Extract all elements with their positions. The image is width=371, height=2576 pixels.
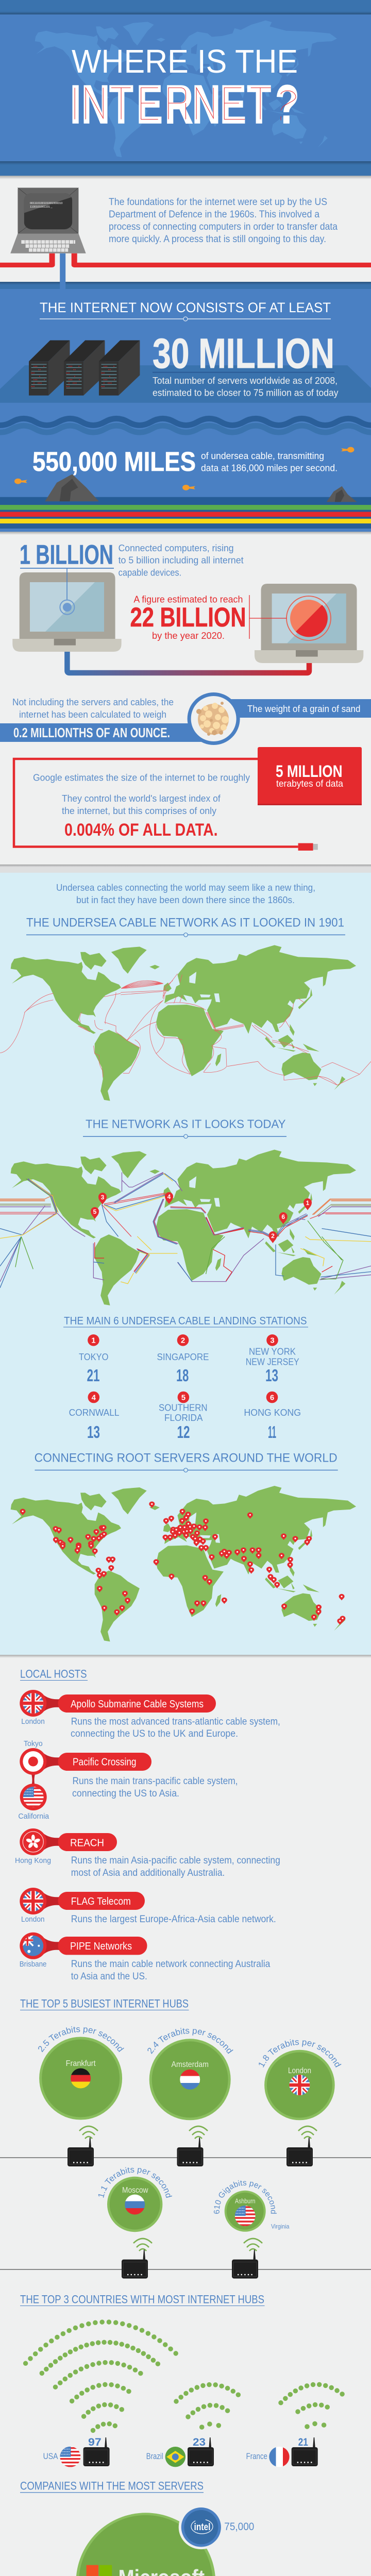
heading today: THE NETWORK AS IT LOOKS TODAY (86, 1117, 285, 1131)
logo: Microsoft (87, 2565, 205, 2576)
landing station list: 2 (181, 1336, 185, 1345)
country: Brazil: 23 (193, 2436, 206, 2448)
heading root servers: CONNECTING ROOT SERVERS AROUND THE WORLD (35, 1451, 338, 1465)
country: France (246, 2436, 318, 2468)
country: USA (43, 2436, 110, 2467)
weight text: Not including the servers and cables, the (12, 697, 174, 707)
signal arcs: Brazil (176, 2384, 240, 2417)
google data panel: terabytes of data (276, 778, 344, 789)
host: PIPE Networks: to Asia and the US. (71, 1971, 147, 1982)
host: FLAG Telecom: London (21, 1915, 44, 1924)
intro text: process of connecting computers in order to transfer data (109, 222, 338, 232)
google data panel: the internet, but this comprises of only (62, 805, 217, 816)
callout: 22 billion: 22 BILLION (130, 602, 246, 633)
intro text: more quickly. A process that is still ongoing to this day. (109, 234, 326, 245)
panel: connected computers: capable devices. (119, 567, 181, 578)
title inline strokes (75, 88, 296, 120)
hub: Amsterdam: 2.4 Terabits per second (147, 2028, 233, 2054)
bubbles (58, 2505, 311, 2576)
landing station list: HONG KONG (244, 1408, 301, 1418)
landing station list (69, 1334, 301, 1442)
connector between laptops (67, 652, 309, 673)
waves (0, 418, 371, 432)
host: FLAG Telecom: FLAG Telecom (71, 1896, 131, 1907)
host: Apollo: London (21, 1717, 45, 1726)
panel: local hosts (15, 1667, 280, 1982)
landing station list: 18 (176, 1366, 189, 1385)
hub: Ashburn: Virginia (271, 2223, 290, 2230)
host: REACH: most of Asia and additionally Australia. (71, 1868, 225, 1878)
intro text: Undersea cables connecting the world may seem like a new thing, (56, 882, 315, 893)
intro text: but in fact they have been down there since the 1860s. (76, 894, 295, 905)
hub: London (259, 2039, 341, 2166)
panel: internet consists of: estimated to be closer to 75 million as of today (153, 387, 339, 398)
host: Pacific Crossing: Pacific Crossing (73, 1757, 136, 1768)
landing station list: CORNWALL (69, 1408, 120, 1418)
icon: servers (0, 340, 371, 403)
host: REACH: Runs the main Asia-pacific cable system, connecting (71, 1855, 280, 1866)
landing station pins on map: 5 (93, 1208, 97, 1215)
hub: Amsterdam (147, 2028, 233, 2166)
panel: internet consists of: of undersea cable, transmitting (201, 450, 324, 461)
panel: connected computers (0, 540, 371, 851)
callout: 22 billion (130, 594, 286, 641)
landing station list: 1 (91, 1336, 96, 1345)
logo: Intel: intel (194, 2522, 210, 2533)
panel: top 3 countries (20, 2293, 345, 2468)
logo: Intel (191, 2519, 254, 2534)
title line two: INTERNET? (70, 74, 299, 135)
hub: London: London (288, 2066, 311, 2075)
country: France: 21 (298, 2436, 308, 2448)
host: Pacific Crossing: connecting the US to Asia. (72, 1788, 179, 1799)
callout: 22 billion: by the year 2020. (152, 630, 225, 641)
intro text (109, 197, 338, 245)
host: Apollo: connecting the US to the UK and Europe. (71, 1728, 238, 1739)
landing station list: 11 (268, 1422, 276, 1442)
heading 1901: THE UNDERSEA CABLE NETWORK AS IT LOOKED IN 1901 (26, 916, 344, 929)
weight stat: 0.2 MILLIONTHS OF AN OUNCE. (13, 725, 170, 740)
landing station list: TOKYO (79, 1352, 108, 1362)
hub: London: 1.8 Terabits per second (259, 2039, 341, 2067)
host: REACH: REACH (70, 1838, 104, 1849)
google data panel: 5 MILLION (276, 762, 342, 781)
host: Pacific Crossing: California (18, 1812, 49, 1821)
landing station list: 4 (92, 1393, 96, 1402)
host: Apollo: Runs the most advanced trans-atlantic cable system, (71, 1717, 280, 1727)
host: REACH (15, 1828, 280, 1878)
heading: COMPANIES WITH THE MOST SERVERS (20, 2479, 204, 2493)
hub: Amsterdam: Amsterdam (171, 2060, 209, 2069)
weight text: internet has been calculated to weigh (19, 709, 166, 720)
icon: vintage computer (0, 188, 371, 290)
map: today's cable network (0, 1149, 371, 1306)
hub: Frankfurt (38, 2026, 124, 2166)
heading landing stations: THE MAIN 6 UNDERSEA CABLE LANDING STATIONS (64, 1315, 307, 1327)
landing station pins on map: 4 (167, 1193, 171, 1200)
title line one: WHERE IS THE (72, 43, 298, 80)
landing station list: 21 (87, 1366, 100, 1385)
signal arcs: France (281, 2384, 345, 2412)
panel: intro: 1100101001101 _ (30, 206, 53, 209)
host: FLAG Telecom (20, 1888, 276, 1925)
host: PIPE Networks: Brisbane (20, 1960, 46, 1969)
icon: left laptop (12, 568, 122, 652)
panel: internet consists of: data at 186,000 miles per second. (201, 463, 338, 473)
host: Pacific Crossing (18, 1739, 238, 1821)
hub: Ashburn: 610 Gigabits per second (213, 2180, 277, 2214)
country: USA: USA (43, 2451, 58, 2461)
hub: Frankfurt: Frankfurt (66, 2059, 96, 2068)
country: USA: 97 (88, 2436, 102, 2448)
intro text (56, 882, 315, 905)
landing station list: SINGAPORE (157, 1352, 209, 1362)
landing station pins on map: 6 (281, 1213, 285, 1221)
map: 1901 cable network (0, 945, 371, 1101)
panel: companies with most servers (20, 2479, 345, 2576)
landing station list: 13 (87, 1422, 100, 1442)
google data panel: 0.004% OF ALL DATA. (64, 820, 218, 840)
panel: top 5 hubs (0, 1997, 371, 2279)
panel: internet consists of: Total number of servers worldwide as of 2008, (153, 375, 338, 386)
landing station list: 6 (270, 1393, 274, 1402)
host: PIPE Networks: Runs the main cable network connecting Australia (71, 1959, 271, 1970)
google data panel: They control the world's largest index of (62, 793, 221, 804)
baseline wires (0, 2158, 371, 2269)
callout: 22 billion: A figure estimated to reach (133, 594, 243, 604)
host: PIPE Networks (20, 1933, 271, 1982)
host: Apollo: Apollo Submarine Cable Systems (71, 1699, 204, 1710)
icon: right laptop (255, 584, 363, 663)
grain caption: The weight of a grain of sand (247, 703, 361, 714)
landing station pins on map: 2 (271, 1232, 275, 1240)
host: Apollo (20, 1690, 280, 1739)
landing station pins on map: 3 (101, 1194, 105, 1201)
stat: 1 billion: 1 BILLION (20, 540, 113, 570)
landing station list: NEW JERSEY (246, 1357, 299, 1367)
background world map (35, 21, 337, 157)
panel: undersea cables (0, 882, 371, 1641)
seabed, cables, fish and rocks (0, 447, 371, 529)
screen binary: 001110100101001000010 (30, 202, 62, 205)
host: Pacific Crossing: Tokyo (24, 1739, 43, 1748)
header panel (35, 21, 337, 157)
heading: THE TOP 5 BUSIEST INTERNET HUBS (20, 1997, 189, 2010)
heading: THE TOP 3 COUNTRIES WITH MOST INTERNET HUBS (20, 2293, 264, 2306)
weight text (12, 697, 174, 720)
hub: Moscow (98, 2167, 172, 2279)
landing station list: 3 (270, 1336, 275, 1345)
hub: Moscow: Moscow (122, 2186, 148, 2195)
host: PIPE Networks: PIPE Networks (70, 1941, 132, 1952)
google data panel (14, 747, 362, 851)
landing station list: SOUTHERN (159, 1403, 208, 1413)
host: FLAG Telecom: Runs the largest Europe-Africa-Asia cable network. (71, 1914, 276, 1925)
country: France: France (246, 2451, 267, 2461)
panel: internet consists of (0, 300, 371, 529)
hub: Ashburn: Ashburn (235, 2197, 256, 2205)
host: Pacific Crossing: Runs the main trans-pacific cable system, (72, 1776, 238, 1787)
landing station list: 12 (177, 1422, 190, 1442)
landing station pins on map: 1 (306, 1199, 310, 1207)
heading: LOCAL HOSTS (20, 1667, 87, 1680)
heading: THE INTERNET NOW CONSISTS OF AT LEAST (40, 300, 331, 315)
panel: connected computers: Connected computers, rising (119, 543, 234, 553)
landing station list: FLORIDA (164, 1413, 203, 1423)
landing station pins on map (91, 1192, 312, 1243)
google data panel: Google estimates the size of the internet to be roughly (33, 772, 250, 783)
landing station list: NEW YORK (249, 1347, 296, 1357)
panel: intro (0, 188, 371, 290)
intro text: Department of Defence in the 1960s. This involved a (109, 209, 319, 220)
hub: Ashburn (213, 2180, 290, 2279)
landing station list: 5 (181, 1393, 185, 1402)
logo: Intel: 75,000 (224, 2521, 254, 2533)
host: REACH: Hong Kong (15, 1856, 51, 1865)
hub: Moscow: 1.1 Terabits per second (98, 2167, 172, 2198)
hub: Frankfurt: 2.5 Terabits per second (38, 2026, 124, 2053)
signal arcs: USA (26, 2322, 179, 2430)
bars and grain of sand (0, 692, 371, 745)
map: root servers (11, 1486, 356, 1641)
intro text: The foundations for the internet were set up by the US (109, 197, 327, 208)
country: Brazil: Brazil (146, 2451, 163, 2461)
panel: connected computers: to 5 billion including all internet (119, 555, 244, 566)
stat: 550,000 miles: 550,000 MILES (32, 447, 196, 477)
landing station list: 13 (265, 1366, 278, 1385)
country: Brazil (146, 2436, 214, 2467)
